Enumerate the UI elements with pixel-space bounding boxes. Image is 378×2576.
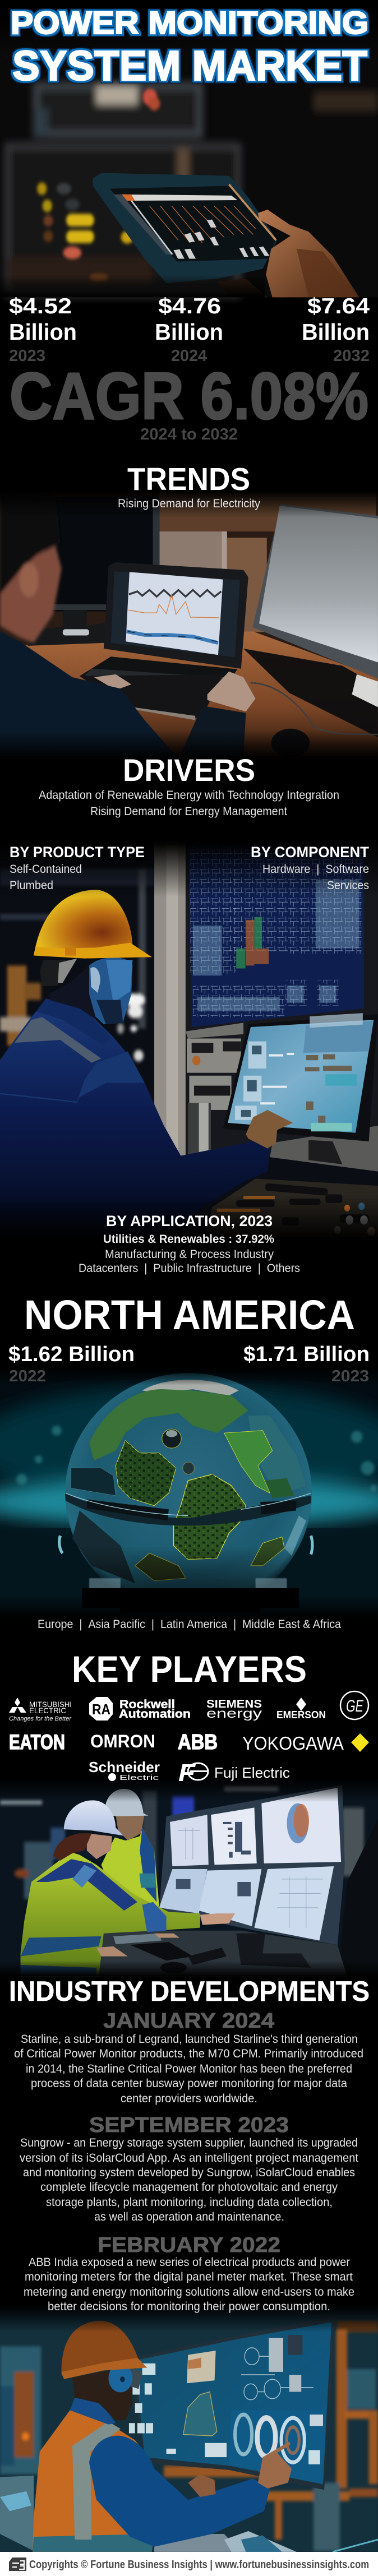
text: september 2023 development: and monitoring system developed by Sungrow, iSolarCloud enables — [23, 2166, 355, 2179]
logo: yokogawa: YOKOGAWA — [242, 1733, 344, 1754]
logo: mitsubishi electric: ELECTRIC — [29, 1706, 66, 1715]
block: by application: BY APPLICATION, 2023 — [106, 1213, 273, 1229]
title — [11, 5, 368, 89]
panel: trends — [0, 461, 378, 759]
stat: 2024 market value: $4.76 — [158, 294, 221, 318]
block: by product type: Plumbed — [10, 879, 53, 892]
text: september 2023 development: version of its iSolarCloud App. As an intelligent project management — [20, 2152, 358, 2165]
panel: hero — [0, 5, 378, 443]
block: by product type: Self-Contained — [10, 863, 82, 876]
heading: north america: NORTH AMERICA — [24, 1292, 355, 1338]
block: by application — [79, 1213, 300, 1275]
photo: worker at control room — [0, 843, 378, 1240]
photo: engineers at monitors — [0, 1779, 378, 1976]
logo: eaton: EATON — [9, 1731, 65, 1754]
text: january 2024 development: process of data center busway power monitoring for major data — [31, 2077, 347, 2090]
stat: 2022 region value: $1.62 Billion — [8, 1343, 135, 1366]
date: september 2023: SEPTEMBER 2023 — [89, 2113, 289, 2137]
stat: 2024 market value: Billion — [155, 319, 223, 345]
logo: emerson — [276, 1698, 326, 1721]
logo: emerson: EMERSON — [276, 1709, 326, 1721]
title: POWER MONITORING — [11, 5, 368, 41]
stat: 2023 market value — [9, 294, 77, 365]
text: driver items — [39, 789, 339, 818]
photo: engineer at laptop — [0, 491, 378, 759]
stat: 2023 market value: $4.52 — [9, 294, 72, 318]
logo: abb: ABB — [178, 1731, 218, 1754]
logo: fuji electric: Fuji Electric — [214, 1764, 290, 1781]
panel: drivers — [39, 752, 339, 818]
stat: 2024 market value: 2024 — [171, 347, 207, 365]
logo: ge: GE — [346, 1697, 364, 1715]
stat: 2024 market value — [155, 294, 223, 365]
stat: 2032 market value: $7.64 — [307, 294, 370, 318]
block: by product type: BY PRODUCT TYPE — [10, 844, 145, 861]
heading: trends: TRENDS — [127, 461, 250, 497]
text: january 2024 development — [14, 2033, 363, 2105]
panel: regional — [0, 1292, 378, 1631]
stat: 2032 market value: Billion — [302, 319, 370, 345]
stat: 2022 region value — [8, 1343, 135, 1385]
block: by component: BY COMPONENT — [251, 844, 369, 861]
logo: rockwell automation: Rockwell — [119, 1698, 175, 1711]
text: february 2022 development: monitoring meters for the digital panel meter market. These smart — [25, 2270, 353, 2283]
text: other regions: Europe | Asia Pacific | Latin America | Middle East & Africa — [38, 1618, 341, 1631]
text: september 2023 development: storage plants, plant monitoring, including data collection, — [46, 2196, 333, 2209]
logo: schneider electric: Schneider — [89, 1759, 160, 1775]
block: by component: Services — [327, 879, 369, 892]
photo: worker at touch screen — [0, 2306, 378, 2552]
text: january 2024 development: in 2014, the Starline Critical Power Monitor has been the preferred — [26, 2062, 352, 2075]
text: february 2022 development: ABB India exposed a new series of electrical products and power — [29, 2256, 350, 2269]
text: trend item: Rising Demand for Electricity — [118, 497, 260, 510]
stat: 2023 region value: 2023 — [331, 1367, 369, 1385]
text: september 2023 development: Sungrow - an Energy storage system supplier, launched its upgraded — [20, 2136, 358, 2149]
stat: 2022 region value: 2022 — [9, 1367, 46, 1385]
text: january 2024 development: of Critical Power Monitor products, the M70 CPM. Primarily introduced — [14, 2047, 363, 2060]
text: september 2023 development: complete lifecycle management for photovoltaic and energy — [40, 2181, 338, 2194]
text: september 2023 development: as well as operation and maintenance. — [94, 2210, 284, 2223]
text: driver items: Adaptation of Renewable Energy with Technology Integration — [39, 789, 339, 802]
text: february 2022 development: better decisions for monitoring their power consumption. — [48, 2300, 330, 2313]
logo: siemens energy — [206, 1698, 262, 1721]
stat: 2023 region value — [243, 1343, 370, 1385]
block: by component: Hardware | Software — [262, 863, 369, 876]
logo: siemens energy: SIEMENS — [206, 1698, 262, 1710]
stat: CAGR: 2024 to 2032 — [140, 426, 238, 443]
date: january 2024: JANUARY 2024 — [103, 2009, 274, 2033]
footer — [0, 2552, 378, 2576]
block: by product type — [10, 844, 145, 892]
block: by application: Datacenters | Public Infrastructure | Others — [79, 1262, 300, 1275]
text: february 2022 development: metering and energy monitoring solutions allow end-users to make — [24, 2286, 354, 2298]
stat: 2032 market value: 2032 — [333, 347, 370, 365]
text: driver items: Rising Demand for Energy Management — [90, 805, 287, 818]
stat: 2023 region value: $1.71 Billion — [243, 1343, 370, 1366]
logo: rockwell automation: RA — [92, 1701, 110, 1718]
logo: rockwell automation — [89, 1697, 191, 1721]
block: by component — [251, 844, 369, 892]
heading: drivers: DRIVERS — [123, 752, 255, 788]
logo: rockwell automation: Automation — [119, 1708, 191, 1721]
logo: fuji electric: F — [178, 1759, 196, 1787]
text: february 2022 development — [24, 2256, 354, 2313]
logo: omron: OMRON — [90, 1731, 155, 1751]
stat: 2032 market value — [302, 294, 370, 365]
logo: siemens energy: energy — [206, 1706, 262, 1721]
panel: segmentation — [0, 843, 378, 1275]
logo: ge — [340, 1691, 368, 1719]
panel: key players — [0, 1648, 378, 1976]
block: by application: Manufacturing & Process Industry — [105, 1248, 274, 1261]
stat: 2023 market value: Billion — [9, 319, 77, 345]
logo: mitsubishi electric: Changes for the Better — [9, 1715, 72, 1722]
heading: key players: KEY PLAYERS — [72, 1648, 307, 1690]
text: january 2024 development: center providers worldwide. — [121, 2092, 257, 2105]
logo: mitsubishi electric — [9, 1698, 72, 1722]
logo: fuji electric — [178, 1759, 290, 1787]
panel: industry developments — [0, 1976, 378, 2552]
photo: tablet in hand — [0, 17, 378, 297]
logo: mitsubishi electric: MITSUBISHI — [29, 1700, 72, 1709]
stat: 2023 market value: 2023 — [9, 347, 45, 365]
title: SYSTEM MARKET — [12, 42, 367, 89]
illustration: globe — [0, 1368, 378, 1618]
date: february 2022: FEBRUARY 2022 — [98, 2233, 280, 2257]
icon: fortune business insights — [9, 2557, 26, 2571]
text: january 2024 development: Starline, a sub-brand of Legrand, launched Starline's third generation — [21, 2033, 358, 2046]
block: by application: Utilities & Renewables : 37.92% — [103, 1233, 274, 1246]
text: september 2023 development — [20, 2136, 358, 2223]
logo: schneider electric: Electric — [119, 1773, 159, 1782]
